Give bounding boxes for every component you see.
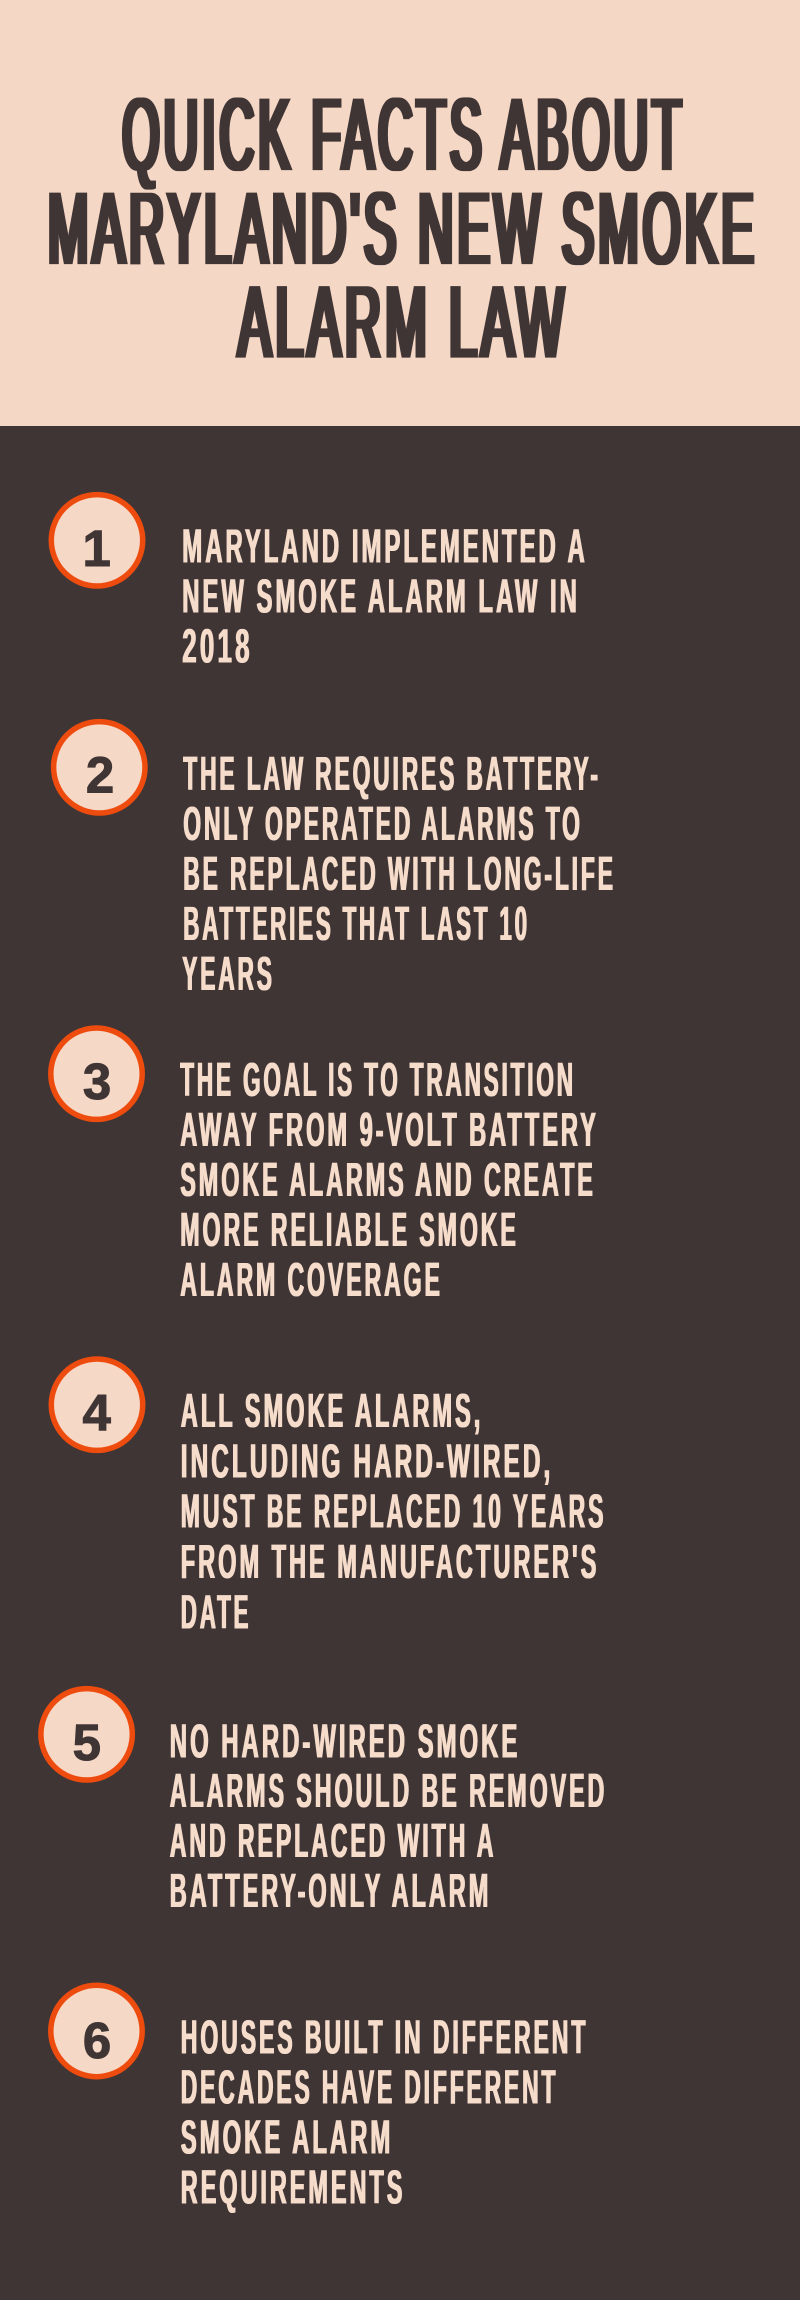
fact 5 (41, 1689, 607, 1918)
panel: title header (0, 0, 800, 426)
number badge 5 (41, 1689, 132, 1780)
fact 6 text: SMOKE ALARM (181, 2111, 393, 2164)
number badge 6: 6 (83, 2012, 111, 2069)
fact 4 text (181, 1385, 606, 1640)
fact 6 text (181, 2011, 588, 2214)
fact 1 text (182, 521, 588, 674)
number badge 3 (51, 1028, 142, 1119)
fact 1 text: 2018 (182, 621, 253, 674)
fact 6 (51, 1985, 588, 2214)
fact 2 text: YEARS (182, 948, 275, 1001)
number badge 3: 3 (83, 1053, 111, 1110)
number badge 4 (51, 1359, 143, 1450)
fact 5 text (170, 1715, 607, 1918)
fact 1 (51, 495, 588, 674)
number badge 5: 5 (73, 1714, 101, 1771)
number badge 2: 2 (86, 747, 114, 804)
fact 2 (54, 722, 616, 1001)
fact 3 (51, 1028, 599, 1307)
fact 2 text (182, 748, 616, 1001)
number badge 1 (51, 495, 143, 586)
fact 6 text: REQUIREMENTS (181, 2161, 405, 2214)
fact 4 text: DATE (181, 1587, 251, 1640)
fact 3 text: ALARM COVERAGE (180, 1254, 443, 1307)
number badge 1: 1 (83, 520, 111, 577)
number badge 4: 4 (83, 1384, 112, 1441)
fact 3 text (180, 1054, 599, 1307)
fact 4 text: ALL SMOKE ALARMS, (181, 1385, 483, 1438)
fact 4 (51, 1359, 606, 1640)
number badge 6 (51, 1985, 142, 2077)
title (48, 78, 758, 379)
number badge 2 (54, 722, 145, 813)
